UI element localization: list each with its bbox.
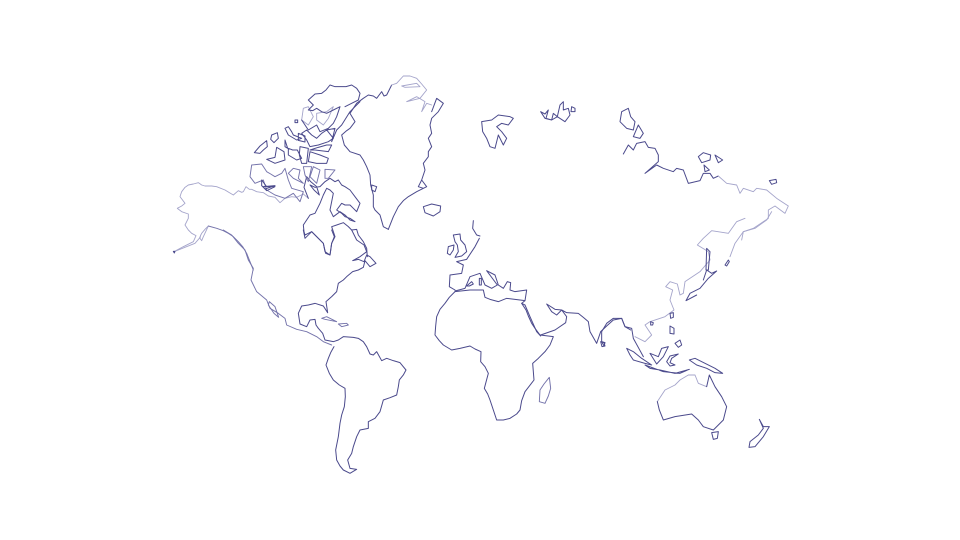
Arabia and South Asia coast	[541, 304, 631, 343]
Borneo	[650, 347, 668, 364]
Scandinavia tip	[473, 221, 480, 236]
Kuril arc	[725, 260, 729, 266]
Arctic coast loop	[250, 164, 303, 202]
Sumatra	[627, 348, 652, 365]
Kamchatka	[730, 212, 772, 257]
Wrangel Island	[769, 179, 777, 184]
Eastern Siberian coast	[718, 176, 788, 240]
Hainan	[651, 322, 653, 325]
Cuba	[322, 317, 337, 322]
Taiwan	[670, 313, 673, 318]
Indochina	[602, 318, 643, 357]
Americas: west coast, South America, Central America, east coast	[223, 230, 406, 473]
Hispaniola	[338, 323, 348, 327]
Canadian Arctic coast and Hudson Bay	[303, 177, 367, 257]
Greenland	[342, 76, 443, 229]
Madagascar	[539, 377, 551, 403]
New Zealand	[749, 419, 769, 447]
Sri Lanka	[601, 342, 605, 347]
Australia south and east	[657, 375, 727, 430]
Pacific northwest coast	[208, 226, 253, 270]
Red Sea	[522, 303, 541, 336]
Alaska and northern coast	[174, 183, 308, 252]
Iberia, Mediterranean Europe	[449, 238, 527, 301]
New Siberian Islands	[698, 153, 723, 172]
Sakhalin	[706, 248, 710, 270]
Java and Sundas	[645, 365, 689, 373]
East Asia, Japan, Southeast Asia, Australia, New Zealand	[602, 212, 772, 447]
Mindanao	[675, 340, 682, 347]
Tasmania	[712, 432, 718, 439]
Pacific coast	[223, 230, 332, 345]
Franz Josef Land	[541, 102, 575, 122]
New Guinea	[689, 358, 723, 373]
North America arctic: Alaska, Canada, Greenland, Iceland	[173, 76, 443, 270]
Arctic islands	[254, 85, 360, 191]
Japan	[686, 270, 717, 301]
Hudson Bay south	[303, 230, 334, 255]
Mediterranean islands	[467, 278, 481, 286]
Iceland	[423, 204, 441, 216]
Britain	[453, 234, 467, 257]
Sulawesi	[667, 354, 678, 366]
Okhotsk and China coast	[635, 218, 745, 342]
Philippines	[670, 326, 674, 334]
Svalbard	[482, 115, 513, 148]
Siberian coast	[623, 142, 718, 183]
Asia arctic coast and Russian islands	[482, 102, 788, 240]
South America and Atlantic coast	[298, 230, 406, 473]
Ireland	[447, 245, 454, 255]
Africa	[435, 290, 553, 420]
Australia	[657, 375, 707, 402]
Baja California	[268, 302, 279, 317]
Europe, Africa, Middle East, South Asia	[435, 221, 631, 420]
Alaska tip	[173, 251, 175, 253]
Novaya Zemlya south	[633, 125, 643, 138]
Novaya Zemlya	[620, 108, 635, 130]
